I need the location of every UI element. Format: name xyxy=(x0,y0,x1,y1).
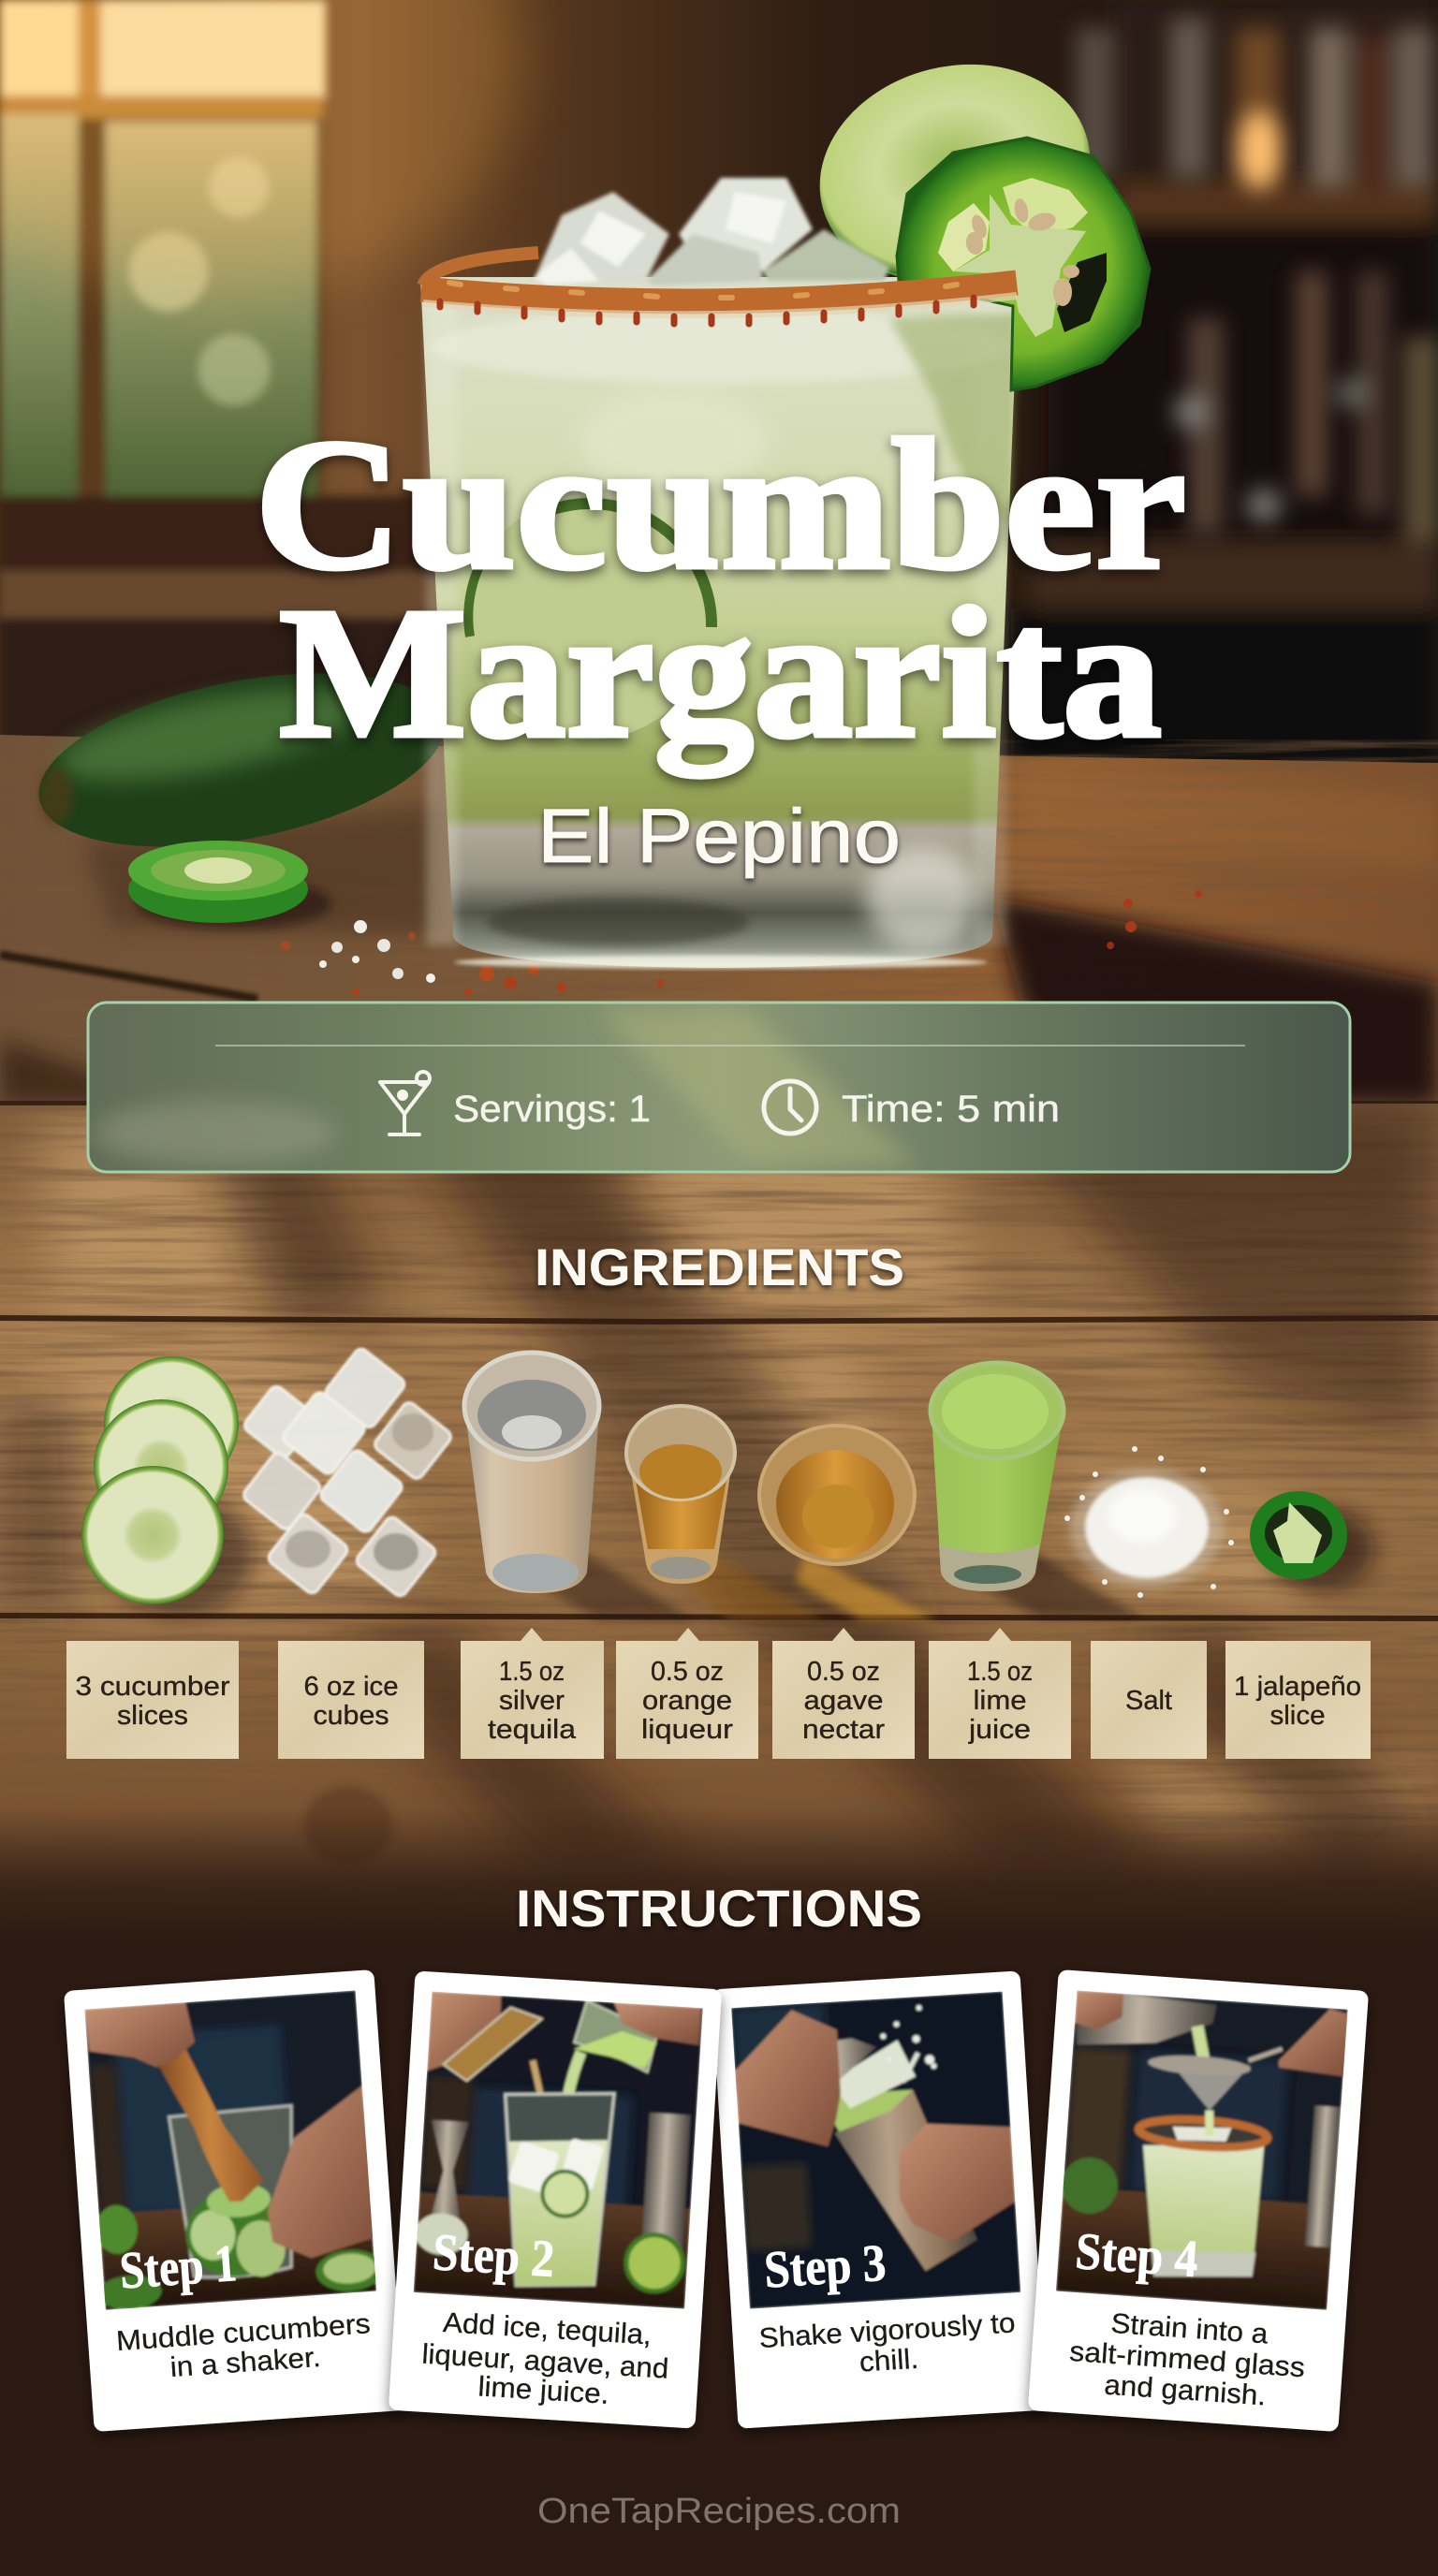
wood grain xyxy=(0,1101,1438,1943)
step 4 title: Step 4 xyxy=(1074,2222,1200,2289)
label: 1 jalapeno slice: 1 jalapeño xyxy=(1234,1672,1361,1702)
floating cucumber in drink xyxy=(468,496,712,739)
ingredient: jalapeno slice xyxy=(1250,1491,1374,1590)
label: 0.5 oz agave nectar xyxy=(772,1628,915,1759)
step 3 title: Step 3 xyxy=(762,2234,888,2300)
step 4 card xyxy=(1028,1969,1369,2432)
footer website: OneTapRecipes.com xyxy=(537,2492,901,2531)
ice cubes xyxy=(534,178,889,285)
table wood grain xyxy=(0,739,1438,1105)
label: 1.5 oz lime juice: juice xyxy=(968,1715,1031,1745)
icon: cocktail glass xyxy=(380,1072,430,1134)
label: 0.5 oz orange liqueur: 0.5 oz xyxy=(651,1657,724,1687)
step 3 text: chill. xyxy=(858,2344,919,2378)
step 2 card xyxy=(389,1970,722,2429)
label: 1.5 oz silver tequila: silver xyxy=(499,1686,565,1716)
label: 1.5 oz silver tequila: tequila xyxy=(488,1715,577,1745)
cucumber garnish slice xyxy=(797,37,1113,310)
step 4 photo: straining into glass xyxy=(1054,1990,1350,2310)
heading: instructions: INSTRUCTIONS xyxy=(516,1879,922,1938)
step 3 photo: shaking xyxy=(731,1992,1020,2309)
step 1 text: in a shaker. xyxy=(169,2342,322,2383)
title: Cucumber Margarita xyxy=(255,402,1186,777)
salt and chili flakes xyxy=(281,890,1202,996)
label: 6 oz ice cubes: cubes xyxy=(313,1701,389,1731)
label: 0.5 oz orange liqueur: orange xyxy=(642,1686,732,1716)
label: 0.5 oz agave nectar: nectar xyxy=(802,1715,885,1745)
ingredient: lime juice shot xyxy=(931,1363,1142,1617)
title: Cucumber Margarita: Cucumber xyxy=(255,402,1186,608)
label: 3 cucumber slices: slices xyxy=(117,1701,188,1731)
label: 1.5 oz lime juice xyxy=(929,1628,1071,1759)
ingredient: orange liqueur shot xyxy=(626,1406,824,1619)
label: 1.5 oz lime juice: lime xyxy=(974,1686,1026,1716)
ingredient: salt pile xyxy=(1064,1446,1234,1598)
ingredient: cucumber slices xyxy=(81,1356,255,1616)
icon: clock xyxy=(764,1081,816,1134)
step 3 text xyxy=(758,2307,1018,2384)
wood knot xyxy=(307,1790,389,1861)
ingredient photo row xyxy=(81,1346,1374,1619)
hero photo: margarita on a rustic bar xyxy=(0,0,1438,1105)
label: 6 oz ice cubes: 6 oz ice xyxy=(303,1672,399,1702)
whole cucumber on table xyxy=(24,644,459,876)
servings text: Servings: 1 xyxy=(453,1089,651,1130)
step 2 title: Step 2 xyxy=(431,2223,556,2289)
step 4 text: Strain into a xyxy=(1109,2308,1269,2350)
step 3 text: Shake vigorously to xyxy=(758,2307,1016,2354)
rustic wooden table top xyxy=(0,735,1438,1105)
wood planks xyxy=(0,1101,1438,1943)
step 2 text: lime juice. xyxy=(477,2371,609,2410)
panel top line xyxy=(215,1045,1245,1046)
background: bar room wall xyxy=(0,0,1438,768)
label: 0.5 oz orange liqueur xyxy=(616,1628,758,1759)
label: 1.5 oz lime juice: 1.5 oz xyxy=(967,1657,1033,1687)
step 1 photo: muddling cucumbers xyxy=(78,1990,385,2311)
back bar shelves with blurred bottles xyxy=(1011,0,1438,768)
label: 1.5 oz silver tequila xyxy=(461,1628,604,1759)
step 3 card xyxy=(712,1970,1047,2429)
wooden ingredients board xyxy=(0,1101,1438,1943)
label: 0.5 oz agave nectar: 0.5 oz xyxy=(807,1657,880,1687)
ingredient: ice cubes xyxy=(241,1346,454,1599)
ingredient label cards xyxy=(66,1628,1371,1759)
label: salt: Salt xyxy=(1125,1686,1172,1716)
table shadows xyxy=(0,768,1438,1105)
glass body with liquid xyxy=(420,277,1019,968)
ingredient: silver tequila shot xyxy=(464,1353,693,1619)
step 1 text: Muddle cucumbers xyxy=(115,2308,372,2357)
condensation and frost xyxy=(426,300,1017,969)
label: 1.5 oz silver tequila: 1.5 oz xyxy=(499,1657,565,1687)
window with sunlit panes xyxy=(0,0,449,749)
step 2 photo: adding ingredients xyxy=(412,1991,703,2309)
label: 0.5 oz agave nectar: agave xyxy=(803,1686,884,1716)
step 2 text: liqueur, agave, and xyxy=(421,2339,669,2385)
panel lower left glow xyxy=(94,1101,337,1164)
heading: ingredients: INGREDIENTS xyxy=(535,1237,904,1296)
jalapeno garnish slice xyxy=(897,138,1150,390)
label: 3 cucumber slices: 3 cucumber xyxy=(75,1672,230,1702)
step 4 text: and garnish. xyxy=(1103,2370,1267,2411)
label: 0.5 oz orange liqueur: liqueur xyxy=(641,1715,733,1745)
label: salt xyxy=(1091,1641,1207,1759)
step 2 text xyxy=(419,2306,671,2414)
ingredient: agave nectar bowl xyxy=(759,1426,936,1619)
margarita glass xyxy=(420,178,1019,969)
label: 3 cucumber slices xyxy=(66,1641,239,1759)
step 1 title: Step 1 xyxy=(118,2234,239,2301)
step 1 card xyxy=(64,1969,404,2432)
subtitle: El Pepino: El Pepino xyxy=(537,794,901,879)
info panel: servings and time xyxy=(88,1003,1350,1172)
dappled shadows xyxy=(0,1101,1438,1872)
plank seams xyxy=(0,1101,1438,1618)
step 4 text: salt-rimmed glass xyxy=(1068,2336,1306,2383)
step 2 text: Add ice, tequila, xyxy=(442,2307,653,2351)
jalapeno slice on table xyxy=(128,841,331,929)
label: 1 jalapeno slice: slice xyxy=(1269,1701,1326,1731)
fade to dark xyxy=(0,1807,1438,1943)
chili salt rim xyxy=(421,253,1017,324)
warm sunlight glow xyxy=(0,0,524,300)
sun patches xyxy=(0,1114,1438,1835)
title: Cucumber Margarita: Margarita xyxy=(279,570,1162,777)
time text: Time: 5 min xyxy=(842,1089,1060,1130)
label: 6 oz ice cubes xyxy=(278,1641,424,1759)
step 1 text xyxy=(115,2308,374,2387)
step 4 text xyxy=(1066,2305,1308,2414)
panel light streak xyxy=(599,1011,917,1165)
label: 1 jalapeno slice xyxy=(1225,1641,1371,1759)
